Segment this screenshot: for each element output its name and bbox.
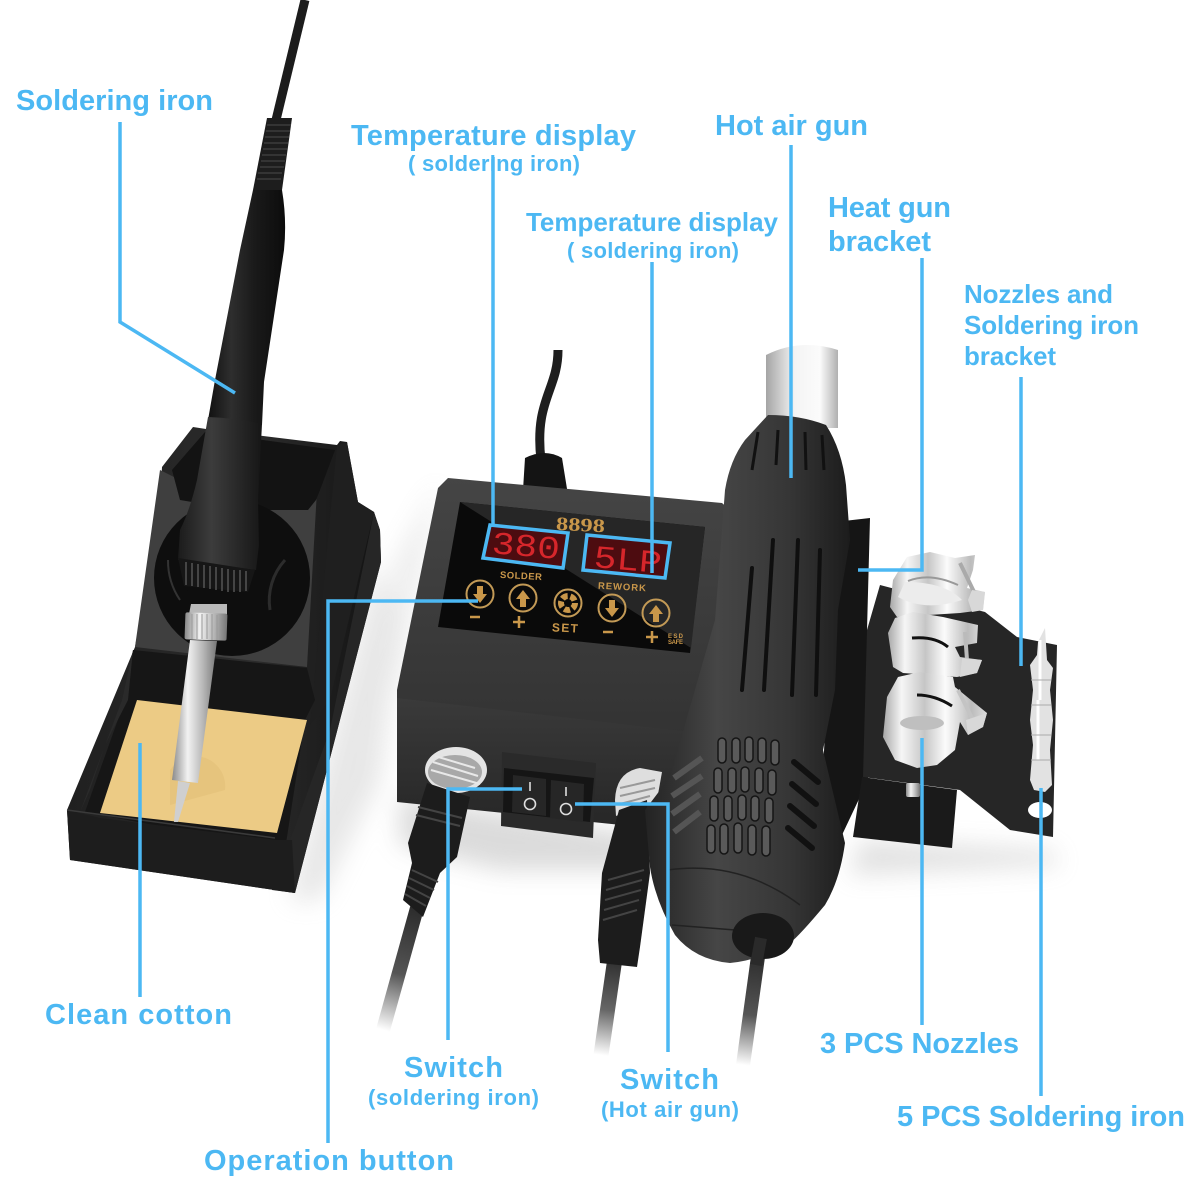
gun vent grid (707, 737, 779, 856)
label: Temperature display: ( soldering iron) (408, 151, 580, 176)
label: 5 PCS Soldering iron: 5 PCS Soldering iron (897, 1101, 1185, 1133)
tray front lip (67, 810, 295, 893)
cable (383, 908, 417, 1030)
line: temperature display 1 (491, 157, 495, 527)
line: switch hot air gun (575, 804, 668, 1052)
iron ribbed strain relief (253, 118, 292, 190)
nozzle bracket plate (863, 585, 1057, 837)
heat gun bracket (820, 518, 1057, 848)
iron tip (174, 781, 190, 822)
cable (601, 958, 615, 1055)
bracket lower box (853, 777, 957, 848)
five soldering iron tips (1030, 628, 1053, 792)
label: Temperature display second: Temperature display (526, 207, 779, 237)
control station (397, 478, 732, 838)
label: Temperature display second: ( soldering iron) (567, 238, 739, 263)
line: 5 pcs soldering iron (1039, 788, 1043, 1096)
label: Switch hot air gun: Switch (620, 1064, 719, 1096)
label: Switch hot air gun: (Hot air gun) (601, 1097, 739, 1122)
rubber boot (598, 800, 650, 967)
label: Nozzles and Soldering iron bracket: bracket (964, 341, 1056, 371)
tray floor (85, 650, 315, 850)
rubber boot (403, 783, 470, 917)
label: Nozzles and Soldering iron bracket: Soldering iron (964, 310, 1139, 340)
station top face (397, 478, 732, 735)
gun body (645, 415, 850, 963)
gun long slots (742, 540, 820, 695)
background shadows (290, 480, 1060, 900)
label: Clean cotton: Clean cotton (45, 999, 232, 1031)
plate hole (1028, 802, 1052, 818)
button rework up (642, 600, 670, 626)
line: hot air gun (789, 145, 793, 478)
display: hot air gun (583, 535, 670, 583)
iron cable (276, 0, 305, 120)
label: Nozzles and Soldering iron bracket (964, 279, 1139, 371)
button solder down (466, 580, 494, 608)
label: Switch hot air gun (601, 1064, 739, 1122)
gun left side vents (672, 758, 702, 832)
stand tray body (67, 427, 381, 893)
iron knurled ring (178, 558, 255, 592)
label: Soldering iron: Soldering iron (16, 85, 213, 117)
label SET: SET (552, 620, 579, 636)
line: temperature display 2 (650, 262, 654, 573)
soldering iron (172, 0, 305, 822)
label: Temperature display (351, 120, 636, 176)
line: soldering iron (120, 122, 235, 393)
rocker switches (501, 752, 596, 838)
line: operation button (328, 601, 478, 1143)
label: Hot air gun: Hot air gun (715, 110, 868, 142)
stand metal plate (135, 470, 317, 667)
display: hot air gun: 5LP (592, 540, 663, 583)
button set (554, 590, 582, 616)
nozzle three (883, 672, 987, 768)
iron handle grip (178, 417, 262, 570)
gun right side vents (788, 762, 818, 848)
stand back opening (172, 432, 335, 510)
iron collar (187, 590, 232, 612)
label: Switch soldering iron: (soldering iron) (368, 1085, 539, 1110)
iron silver knurl (185, 612, 227, 641)
bracket upright (820, 518, 870, 835)
gun bottom seam (668, 868, 800, 930)
silver socket (425, 747, 487, 793)
label ESD SAFE: ESD (668, 634, 684, 640)
label: Switch soldering iron: Switch (404, 1052, 503, 1084)
plus and minus marks (470, 616, 658, 643)
label REWORK: REWORK (598, 581, 646, 594)
label: Heat gun bracket: bracket (828, 226, 931, 258)
hot air gun (645, 345, 850, 965)
label: Heat gun bracket: Heat gun (828, 192, 951, 224)
gun cable gland (732, 913, 794, 959)
nozzle two (888, 612, 982, 677)
iron holder ring (154, 500, 310, 656)
line: nozzles and soldering iron bracket (1019, 377, 1023, 666)
label: Temperature display second (526, 207, 779, 263)
line: heat gun bracket (858, 258, 922, 570)
callout lines (120, 122, 1041, 1143)
buttons (466, 580, 670, 643)
label: Operation button: Operation button (204, 1145, 454, 1177)
three nozzles (883, 552, 987, 768)
label: Temperature display: Temperature display (351, 120, 636, 152)
iron steel tube (172, 640, 217, 783)
label: Nozzles and Soldering iron bracket: Nozzles and (964, 279, 1113, 309)
power cable behind station (523, 350, 568, 495)
strain relief (523, 453, 568, 495)
display outline 1 (483, 525, 568, 568)
right connector and cable (598, 768, 662, 1055)
left connector and cable (383, 747, 487, 1030)
control panel glass (438, 502, 705, 653)
stand right wall highlight (310, 442, 374, 725)
label: Heat gun bracket (828, 192, 951, 258)
button rework down (598, 594, 626, 622)
display: soldering iron: 380 (490, 526, 561, 569)
line: clean cotton (138, 743, 142, 997)
nozzle one (890, 552, 985, 617)
model label: 8898 (555, 514, 605, 537)
label ESD SAFE: SAFE (668, 640, 683, 646)
line: switch soldering iron (448, 789, 522, 1040)
silver socket (615, 768, 662, 816)
gun silver nozzle (766, 345, 838, 428)
iron handle upper (208, 190, 285, 425)
label ESD SAFE (668, 634, 684, 646)
display outline 2 (583, 535, 670, 578)
hot air gun cable (743, 935, 761, 1065)
label: Switch soldering iron (368, 1052, 539, 1110)
display: soldering iron (483, 525, 568, 569)
station front face (397, 698, 700, 830)
bracket pin (906, 783, 920, 797)
label SOLDER: SOLDER (500, 570, 542, 583)
soldering stand (67, 427, 381, 893)
line: 3 pcs nozzles (920, 738, 924, 1025)
clean cotton sponge (100, 700, 307, 833)
button solder up (510, 584, 536, 612)
label: 3 PCS Nozzles: 3 PCS Nozzles (820, 1028, 1019, 1060)
gun neck vents (752, 430, 824, 470)
